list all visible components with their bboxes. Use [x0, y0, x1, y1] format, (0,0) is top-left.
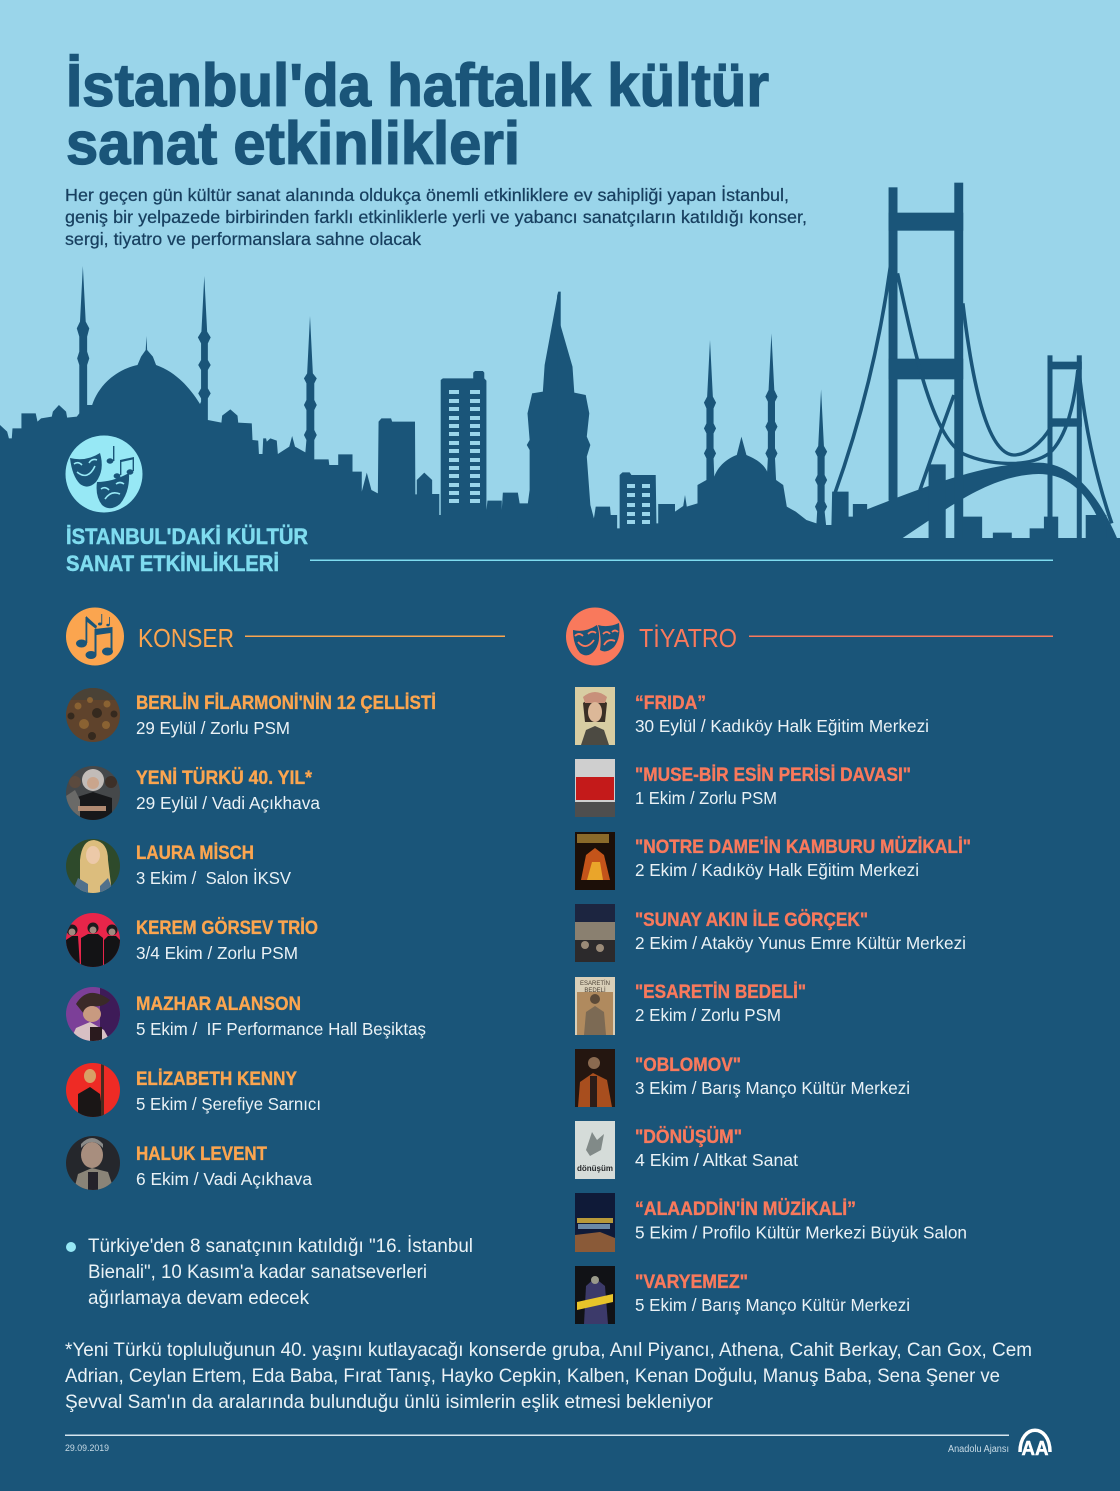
footnote — [65, 1339, 1032, 1413]
artist: Laura Misch: LAURA MİSCH — [136, 843, 254, 864]
artist: Kerem Görsev: KEREM GÖRSEV TRİO — [136, 918, 318, 939]
footnote: *Yeni Türkü topluluğunun 40. yaşını kutlayacağı konserde gruba, Anıl Piyancı, Athena, Cahit Berkay, Can Gox, Cem — [65, 1339, 1032, 1361]
play: Sunay Akın: 2 Ekim / Ataköy Yunus Emre Kültür Merkezi — [635, 933, 966, 953]
footnote: Şevval Sam'ın da aralarında bulunduğu ünlü isimlerin eşlik etmesi bekleniyor — [65, 1391, 713, 1413]
artist: Berlin — [136, 693, 436, 738]
bridge: towers, cables, deck underside — [834, 183, 1112, 539]
poster: Frida — [575, 687, 615, 745]
callout: biennial note — [66, 1234, 473, 1309]
poster: Dönüşüm — [575, 1121, 615, 1179]
artist: Yeni Türkü: 29 Eylül / Vadi Açıkhava — [136, 793, 320, 813]
poster: Oblomov — [575, 1049, 615, 1107]
artist: Laura Misch: 3 Ekim / Salon İKSV — [136, 868, 291, 888]
section heading — [66, 524, 308, 576]
heading: tiyatro: TİYATRO — [639, 623, 737, 653]
artist: Haluk Levent: HALUK LEVENT — [136, 1144, 267, 1165]
play: Varyemez: "VARYEMEZ" — [635, 1272, 748, 1293]
callout: biennial note: ağırlamaya devam edecek — [88, 1287, 309, 1309]
play: Muse: "MUSE-BİR ESİN PERİSİ DAVASI" — [635, 765, 911, 786]
play: Sunay Akın: "SUNAY AKIN İLE GÖRÇEK" — [635, 910, 868, 931]
icon: masks and notes badge — [66, 436, 142, 512]
artist: Yeni Türkü — [136, 768, 320, 813]
intro text — [65, 185, 807, 249]
artist: Kerem Görsev — [136, 918, 318, 963]
play: Muse — [635, 765, 911, 808]
artist: Haluk Levent — [136, 1144, 312, 1189]
play: Oblomov: "OBLOMOV" — [635, 1055, 741, 1076]
play: Varyemez: 5 Ekim / Barış Manço Kültür Merkezi — [635, 1295, 910, 1315]
poster: Esaretin Bedeli: BEDELİ — [584, 987, 606, 994]
footnote: Adrian, Ceylan Ertem, Eda Baba, Fırat Tanış, Hayko Cepkin, Kalben, Kenan Doğulu, Manuş Baba, Sena Şener ve — [65, 1365, 1000, 1387]
artist: Elizabeth Kenny: 5 Ekim / Şerefiye Sarnıcı — [136, 1094, 321, 1114]
poster: Esaretin Bedeli — [575, 977, 615, 1035]
photo: Elizabeth Kenny — [66, 1063, 120, 1117]
intro text: Her geçen gün kültür sanat alanında oldukça önemli etkinliklere ev sahipliği yapan İstanbul, — [65, 185, 789, 205]
play: Esaretin Bedeli: 2 Ekim / Zorlu PSM — [635, 1005, 781, 1025]
play: Muse: 1 Ekim / Zorlu PSM — [635, 788, 777, 808]
play: Dönüşüm: "DÖNÜŞÜM" — [635, 1127, 742, 1148]
play: Esaretin Bedeli — [635, 982, 806, 1025]
poster: Varyemez — [575, 1266, 615, 1324]
poster: Notre Dame — [575, 832, 615, 890]
play: Alaaddin: 5 Ekim / Profilo Kültür Merkezi Büyük Salon — [635, 1222, 967, 1242]
callout: biennial note: Türkiye'den 8 sanatçının katıldığı "16. İstanbul — [88, 1234, 473, 1257]
dark lower panel — [0, 538, 1120, 1491]
icon: AA logo — [1020, 1430, 1050, 1460]
photo: Haluk Levent — [66, 1136, 120, 1190]
play: Dönüşüm: 4 Ekim / Altkat Sanat — [635, 1150, 798, 1170]
artist: Mazhar Alanson: MAZHAR ALANSON — [136, 994, 301, 1015]
callout: biennial note: Bienali", 10 Kasım'a kadar sanatseverleri — [88, 1261, 427, 1283]
artist: Berlin: 29 Eylül / Zorlu PSM — [136, 718, 290, 738]
poster: Dönüşüm: dönüşüm — [577, 1164, 613, 1173]
play: Frida: “FRIDA” — [635, 693, 706, 714]
photo: Mazhar Alanson — [66, 987, 120, 1041]
artist: Mazhar Alanson: 5 Ekim / IF Performance Hall Beşiktaş — [136, 1019, 426, 1039]
section heading: İSTANBUL'DAKİ KÜLTÜR — [66, 524, 308, 549]
icon: AA logo: AA — [1022, 1438, 1048, 1460]
title: İstanbul'da haftalık kültür — [66, 52, 769, 119]
artist: Yeni Türkü: YENİ TÜRKÜ 40. YIL* — [136, 768, 313, 789]
poster: Alaaddin — [575, 1193, 615, 1252]
heading: konser: KONSER — [138, 623, 234, 653]
play: Varyemez — [635, 1272, 910, 1315]
panel: konser — [66, 608, 505, 1190]
photo: Kerem Görsev Trio — [66, 913, 120, 967]
play: Frida — [635, 693, 929, 736]
artist: Haluk Levent: 6 Ekim / Vadi Açıkhava — [136, 1169, 312, 1189]
photo: Yeni Türkü — [66, 766, 120, 820]
play: Frida: 30 Eylül / Kadıköy Halk Eğitim Merkezi — [635, 716, 929, 736]
section heading: SANAT ETKİNLİKLERİ — [66, 551, 279, 576]
poster: Esaretin Bedeli: ESARETİN — [580, 980, 610, 987]
icon: theatre masks — [566, 608, 624, 666]
artist: Berlin: BERLİN FİLARMONİ'NİN 12 ÇELLİSTİ — [136, 693, 436, 714]
title — [66, 52, 769, 177]
artist: Kerem Görsev: 3/4 Ekim / Zorlu PSM — [136, 943, 298, 963]
tower block windows — [449, 390, 650, 524]
poster: Muse — [575, 759, 615, 817]
sky background — [0, 0, 1120, 540]
date: 29.09.2019 — [65, 1443, 109, 1454]
skyline: mosque, minarets, tower block, Galata — [0, 266, 1120, 590]
intro text: geniş bir yelpazede birbirinden farklı etkinliklerle yerli ve yabancı sanatçıların katıldığı konser, — [65, 207, 807, 227]
play: Dönüşüm — [635, 1127, 798, 1170]
agency name: Anadolu Ajansı — [948, 1444, 1009, 1455]
play: Notre Dame: 2 Ekim / Kadıköy Halk Eğitim Merkezi — [635, 860, 919, 880]
play: Esaretin Bedeli: "ESARETİN BEDELİ" — [635, 982, 806, 1003]
photo: Laura Misch — [66, 839, 120, 893]
icon: music notes — [66, 608, 124, 666]
photo: Berlin — [66, 688, 120, 742]
artist: Elizabeth Kenny: ELİZABETH KENNY — [136, 1069, 297, 1090]
play: Alaaddin — [635, 1199, 967, 1242]
poster: Sunay Akın — [575, 904, 615, 962]
title: sanat etkinlikleri — [66, 110, 520, 177]
play: Notre Dame: "NOTRE DAME'İN KAMBURU MÜZİKALİ" — [635, 837, 971, 858]
play: Alaaddin: “ALAADDİN'İN MÜZİKALİ” — [635, 1199, 856, 1220]
intro text: sergi, tiyatro ve performanslara sahne olacak — [65, 229, 421, 249]
panel: tiyatro — [566, 608, 1053, 1324]
artist: Mazhar Alanson — [136, 994, 426, 1039]
artist: Elizabeth Kenny — [136, 1069, 321, 1114]
play: Oblomov — [635, 1055, 910, 1098]
play: Notre Dame — [635, 837, 971, 880]
play: Sunay Akın — [635, 910, 966, 953]
artist: Laura Misch — [136, 843, 291, 888]
play: Oblomov: 3 Ekim / Barış Manço Kültür Merkezi — [635, 1078, 910, 1098]
